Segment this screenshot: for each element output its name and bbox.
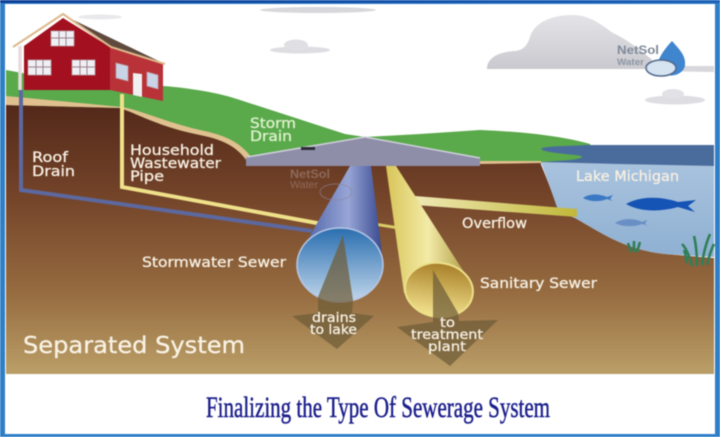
side wing — [110, 47, 163, 101]
watermark logo: NetSol Water: Water — [617, 57, 645, 67]
label: to treatment plant: to — [440, 316, 455, 331]
label: to treatment plant — [411, 316, 483, 355]
front wall — [24, 18, 110, 90]
title: Finalizing the Type Of Sewerage System — [206, 391, 550, 424]
label: to treatment plant: treatment — [411, 328, 483, 343]
sanitary sewer pipe — [386, 166, 476, 321]
storm drain grate — [246, 137, 480, 166]
house — [13, 14, 165, 101]
label: storm drain: Drain — [250, 129, 292, 145]
faint watermark — [290, 167, 330, 191]
label: household wastewater pipe: Wastewater — [130, 156, 221, 172]
label: household wastewater pipe: Household — [130, 143, 214, 159]
stormwater sewer pipe — [296, 166, 383, 302]
overflow pipe — [377, 196, 577, 229]
roof — [63, 15, 165, 64]
arrow: to treatment plant — [397, 270, 498, 366]
label: sanitary sewer: Sanitary Sewer — [480, 276, 597, 292]
label: drains to lake — [310, 311, 357, 338]
roof drain pipe — [20, 46, 312, 231]
label: household wastewater pipe: Pipe — [130, 169, 164, 185]
label: household wastewater pipe — [130, 143, 221, 185]
label: stormwater sewer: Stormwater Sewer — [142, 255, 286, 271]
label: drains to lake: drains — [312, 311, 356, 326]
watermark logo: NetSol Water: NetSol — [617, 43, 659, 57]
label: storm drain — [250, 116, 296, 145]
watermark ellipse over pipe — [320, 184, 352, 200]
green hills — [6, 70, 600, 165]
fish — [583, 194, 696, 226]
grass — [628, 234, 714, 266]
label: roof drain — [32, 150, 75, 180]
label: roof drain: Roof — [32, 150, 69, 166]
faint watermark: Water — [290, 180, 319, 191]
label: to treatment plant: plant — [428, 340, 466, 355]
watermark logo: NetSol Water — [617, 41, 685, 76]
roof trim — [13, 14, 165, 64]
household wastewater pipe — [122, 94, 322, 224]
arrow: drains to lake — [292, 235, 374, 349]
tan topsoil band — [6, 96, 252, 166]
clouds — [78, 7, 714, 104]
label: drains to lake: to lake — [310, 323, 357, 338]
Lake Michigan water — [541, 145, 714, 257]
label: lake michigan: Lake Michigan — [576, 169, 679, 185]
soil ground — [6, 105, 714, 374]
label: storm drain: Storm — [250, 116, 296, 132]
label: roof drain: Drain — [32, 164, 75, 180]
windows — [28, 31, 158, 89]
door — [133, 73, 142, 97]
faint watermark: NetSol — [290, 167, 330, 181]
label: overflow: Overflow — [462, 216, 527, 232]
heading: separated system: Separated System — [23, 333, 245, 359]
